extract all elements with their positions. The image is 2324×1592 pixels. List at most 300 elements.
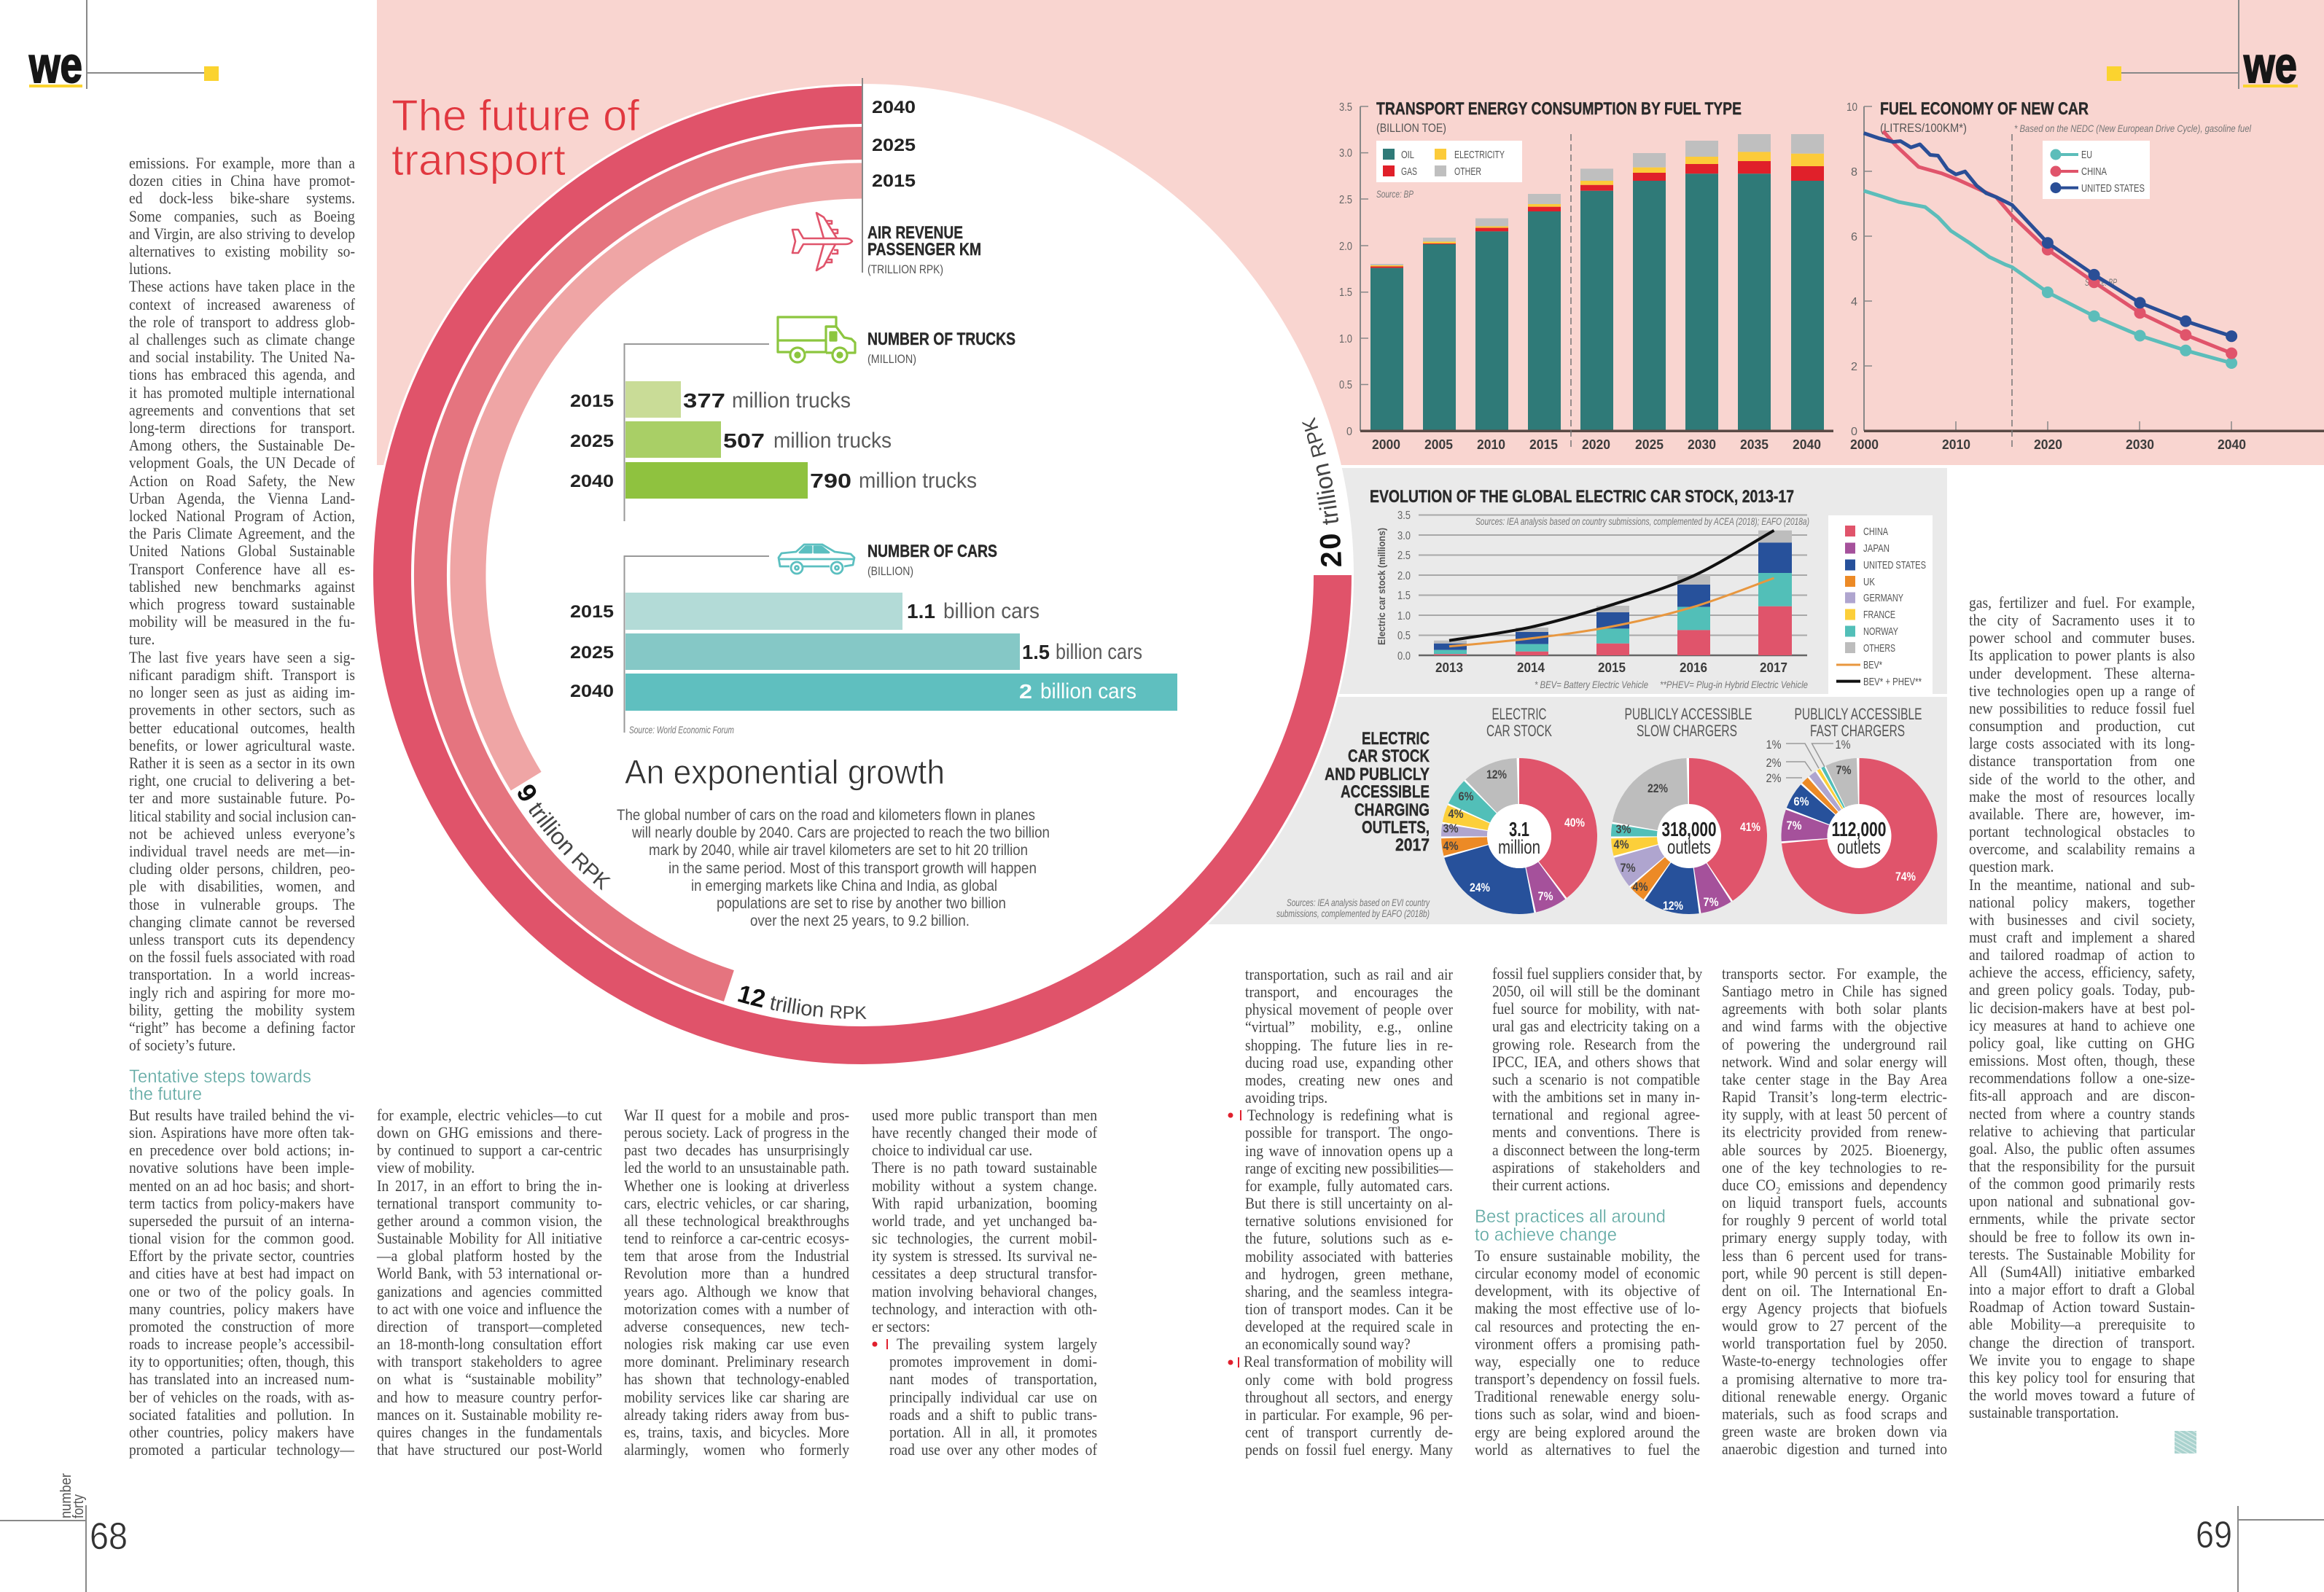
text column: right page 1: “virtual” mobility, e.g., online — [1245, 1018, 1453, 1036]
label: number of trucks: (MILLION) — [867, 352, 916, 366]
footnote — [1535, 679, 1808, 690]
x axis years: 2000 — [1372, 437, 1400, 452]
y axis: 3.0 — [1339, 147, 1352, 160]
text column: tentative steps 3: has shown that technology-enabled — [624, 1370, 849, 1388]
axes: 2010 — [1942, 437, 1970, 452]
text column: tentative steps 4: world trade, and yet unchanged ba- — [872, 1211, 1097, 1230]
x axis years: 2015 — [1598, 660, 1626, 675]
ring year labels — [872, 98, 916, 191]
divider line at ring start — [862, 78, 863, 273]
x axis years: 2013 — [1435, 660, 1463, 675]
text column: tentative steps 4: choice to individual car use. — [872, 1141, 1032, 1159]
masthead: we logo left: we — [28, 36, 82, 93]
text column: left page top: transportation. In a world increas- — [129, 965, 355, 983]
text column: tentative steps 3: adverse consequences, new tech- — [624, 1317, 849, 1335]
text column: right page 1: ing wave of innovation opens up a — [1245, 1142, 1453, 1160]
donut heading — [1624, 705, 1752, 740]
text column: right page 4: the world moves toward a future of — [1969, 1386, 2195, 1404]
text column: right page 2: their current actions. — [1492, 1176, 1610, 1194]
text column: right page 4: with businesses and civil society, — [1969, 910, 2195, 929]
text column: left page top: al challenges such as climate change — [129, 330, 355, 348]
bar chart: trucks: 2015 — [570, 391, 614, 411]
line: EU — [1864, 191, 2237, 369]
legend: fuel types: ELECTRICITY — [1454, 149, 1505, 161]
text column: right page 3: a promising alternative to more tra- — [1722, 1370, 1947, 1388]
percentage labels — [1766, 738, 1916, 883]
icon: airplane — [792, 213, 852, 270]
text block: exponential growth summary: mark by 2040, while air travel kilometers are set to hit 20 trillion — [649, 842, 1028, 859]
percentage labels: 4% — [1448, 807, 1464, 821]
gridlines and y axis labels — [1397, 510, 1807, 663]
text column: right page 4: ernments, while the private sector — [1969, 1209, 2195, 1228]
text column: right page 4: consumption and production, cut — [1969, 717, 2195, 735]
axes: 2 — [1851, 361, 1857, 373]
label: number of trucks: NUMBER OF TRUCKS — [867, 329, 1015, 349]
text column: tentative steps 3: cars, electric vehicles, or car sharing, — [624, 1194, 849, 1212]
text column: left page top: The last five years have seen a sig- — [129, 648, 355, 666]
legend: fuel types: OIL — [1401, 149, 1414, 161]
text column: tentative steps 4: portation. All in all, it promotes — [889, 1423, 1097, 1441]
text column: right page 3: and wind farms with the objective — [1722, 1017, 1947, 1035]
ring year labels: 2025 — [872, 136, 916, 155]
text column: right page 1: Technology is redefining what is — [1247, 1106, 1453, 1124]
axes: 8 — [1851, 166, 1857, 179]
axes: 10 — [1847, 101, 1857, 114]
text column: right page 4: Roadmap of Action toward Sustain- — [1969, 1298, 2195, 1316]
x axis years: 2015 — [1529, 437, 1558, 452]
percentage labels: 7% — [1620, 861, 1636, 875]
donut heading — [1795, 705, 1922, 740]
text column: right page 3: anaerobic digestion and turned into — [1722, 1440, 1947, 1458]
x axis years — [1435, 660, 1787, 675]
text column: left page top: ingly rich and aspiring for more mo- — [129, 983, 355, 1002]
axes: 2040 — [2218, 437, 2246, 452]
text column: left page top: bility, getting the mobility system — [129, 1001, 355, 1019]
bar chart: cars: 2040 — [570, 682, 614, 701]
text block: exponential growth summary: The global number of cars on the road and kilometers flown in planes — [617, 807, 1035, 824]
text column: best practices: development, with its objective of — [1475, 1281, 1700, 1300]
text column: tentative steps 3: Revolution more than a hundred — [624, 1264, 849, 1282]
text column: best practices: transport’s dependency on fossil fuels. — [1475, 1370, 1700, 1388]
text column: tentative steps 2: down on GHG emissions and there- — [377, 1123, 602, 1142]
text column: right page 2: ural gas and electricity taking on a — [1492, 1017, 1700, 1035]
x axis years: 2010 — [1477, 437, 1505, 452]
text column: tentative steps 2: view of mobility. — [377, 1158, 475, 1177]
chart: fuel economy of new car — [1847, 99, 2324, 452]
text column: right page 1: the future, solutions such as e- — [1245, 1229, 1453, 1247]
text column: tentative steps 4: er sectors: — [872, 1317, 930, 1335]
text column: left page top: ture. — [129, 630, 155, 648]
axes: 4 — [1851, 296, 1857, 308]
text column: tentative steps 4: principally individual car use on — [889, 1388, 1097, 1405]
text column: right page 2 — [1492, 964, 1703, 1194]
text column: right page 3: Rapid Transit’s long-term electric- — [1722, 1088, 1947, 1106]
text column: left page top: Action on Road Safety, the New — [129, 472, 355, 490]
axes — [1847, 101, 2324, 452]
text column: right page 4: should be free to follow its own in- — [1969, 1228, 2195, 1246]
text column: right page 4: into a major effort to draft a Global — [1969, 1280, 2195, 1298]
text column: tentative steps 4: cessitates a deep structural transfor- — [872, 1264, 1097, 1282]
text column: right page 4: national policy makers, together — [1969, 893, 2195, 911]
text column: right page 3: dent on oil. The International En- — [1722, 1281, 1947, 1300]
chart title: (LITRES/100KM*) — [1880, 121, 1967, 135]
text column: right page 3: materials, such as food scraps and — [1722, 1405, 1947, 1423]
donut centre value: 318,000 — [1662, 818, 1716, 840]
text column: tentative steps 1: ity to opportunities; often, though, this — [129, 1352, 354, 1370]
percentage labels: 4% — [1614, 838, 1629, 851]
text column: right page 3: for roughly 9 percent of world total — [1722, 1211, 1947, 1229]
text column: tentative steps 4: There is no path toward sustainable — [872, 1158, 1097, 1177]
text column: left page top: unless transport cuts its dependency — [129, 930, 355, 948]
legend: regions: CHINA — [2081, 165, 2107, 178]
pink header background — [377, 0, 2324, 465]
text column: tentative steps 1: superseded the pursuit of an interna- — [129, 1211, 354, 1230]
icon: car — [779, 545, 854, 574]
text column: left page top: the Paris Climate Agreement, and the — [129, 524, 355, 542]
chart title: TRANSPORT ENERGY CONSUMPTION BY FUEL TYPE — [1376, 99, 1742, 119]
chart: transport energy consumption by fuel type — [1339, 99, 1833, 452]
bar chart: cars: 2 — [1019, 680, 1032, 703]
text column: left page top: benefits, or lower agricultural waste. — [129, 736, 355, 754]
legend: countries: CHINA — [1863, 526, 1888, 538]
y axis: 1.0 — [1339, 333, 1352, 346]
text column: tentative steps 2: ternational transport community to- — [377, 1194, 602, 1212]
legend: fuel types: OTHER — [1454, 165, 1481, 178]
text column: tentative steps 3: nologies risk making car use even — [624, 1335, 849, 1353]
legend: regions: UNITED STATES — [2081, 182, 2145, 195]
text column: right page 4: emissions. Most often, though, these — [1969, 1051, 2195, 1069]
legend: countries: GERMANY — [1863, 592, 1903, 604]
text column: best practices: ergy are being explored around the — [1475, 1423, 1700, 1441]
grey panel: charging outlets pies — [1166, 697, 1947, 924]
text column: tentative steps 1: sion. Aspirations have more often tak- — [129, 1123, 354, 1142]
text column: right page 2: ternational and regional agree- — [1492, 1105, 1700, 1123]
text column: best practices: tions such as solar, wind and bioen- — [1475, 1405, 1700, 1423]
heading: best practices all around: to achieve change — [1475, 1225, 1617, 1245]
text column: right page 1: range of exciting new possibilities— — [1245, 1159, 1453, 1177]
text column: right page 4: available. There are, however, im- — [1969, 805, 2195, 823]
percentage labels: 24% — [1470, 881, 1490, 894]
source: charging outlets: Sources: IEA analysis based on EVI country — [1287, 897, 1430, 908]
chart: evolution of the global electric car stock — [1370, 487, 1933, 694]
legend: fuel types: GAS — [1401, 165, 1417, 178]
text column: tentative steps 2: In 2017, in an effort to bring the in- — [377, 1177, 602, 1195]
text column: right page 4: make the most of resources locally — [1969, 787, 2195, 805]
bar chart: cars: billion cars — [1040, 679, 1136, 703]
text column: left page top: lutions. — [129, 260, 171, 278]
donut heading: FAST CHARGERS — [1810, 722, 1905, 740]
text column: tentative steps 4: sic technologies, the current mobil- — [872, 1229, 1097, 1247]
text column: left page top: United Nations Global Sustainable — [129, 542, 355, 560]
gridlines and y axis labels: 1.5 — [1397, 590, 1411, 602]
text column: left page top: tablished new benchmarks against — [129, 577, 355, 596]
gridlines and y axis labels: 3.0 — [1397, 530, 1411, 542]
source: charging outlets: submissions, complemented by EAFO (2018b) — [1276, 908, 1430, 919]
folio: page 69: 69 — [2196, 1514, 2232, 1556]
gridlines and y axis labels: 0.0 — [1397, 650, 1411, 663]
bar chart: trucks: million trucks — [773, 429, 892, 453]
text column: right page 1: ternative solutions envisioned for — [1245, 1211, 1453, 1230]
text column: tentative steps 4: have recently changed their mode of — [872, 1123, 1097, 1142]
heading: electric car stock and charging outlets: CHARGING — [1354, 800, 1430, 820]
text column: left page top: litical stability and social inclusion can- — [129, 807, 356, 825]
label: number of cars: (BILLION) — [867, 564, 913, 578]
grey panel: electric car stock chart — [1239, 468, 1947, 694]
text column: right page 2: aspirations of stakeholders and — [1492, 1158, 1700, 1177]
text column: left page top: locked National Program of Action, — [129, 507, 355, 525]
text column: right page 3: able sources by 2025. Bioenergy, — [1722, 1141, 1947, 1159]
donut centre value: outlets — [1667, 836, 1711, 858]
text column: tentative steps 1: roads to increase people’s accessibil- — [129, 1335, 354, 1353]
text column: tentative steps 2: Sustainable Mobility for All initiative — [377, 1229, 602, 1247]
text column: right page 2: IPCC, IEA, and others shows that — [1492, 1053, 1700, 1071]
text column: tentative steps 3: War II quest for a mobile and pros- — [624, 1106, 849, 1124]
text column: right page 4: goal. Also, the public often assumes — [1969, 1139, 2195, 1158]
bar chart: trucks: million trucks — [859, 469, 977, 493]
text column: left page top: it has promoted multiple international — [129, 383, 355, 402]
heading: electric car stock and charging outlets: 2017 — [1395, 835, 1430, 855]
cars bracket lines — [624, 556, 769, 733]
x axis years: 2005 — [1424, 437, 1453, 452]
legend: countries: UNITED STATES — [1863, 559, 1926, 571]
text column: right page 1: possible for transport. The ongo- — [1245, 1123, 1453, 1142]
percentage labels: 2% — [1766, 771, 1782, 785]
text column: right page 3: ditional renewable energy. Organic — [1722, 1387, 1947, 1405]
text column: right page 4: this key policy tool for ensuring that — [1969, 1368, 2195, 1386]
heading: tentative steps towards the future: the future — [129, 1084, 202, 1104]
text column: right page 4: question mark. — [1969, 857, 2054, 875]
text column: tentative steps 1: promoted a particular technology— — [129, 1440, 354, 1459]
text column: right page 1: ducing road use, expanding other — [1245, 1053, 1453, 1072]
heading: electric car stock and charging outlets: AND PUBLICLY — [1325, 765, 1430, 784]
gridlines and y axis labels: 0.5 — [1397, 630, 1411, 642]
bar chart: trucks — [570, 381, 977, 499]
text column: right page 4: policy goal, like cutting on GHG — [1969, 1034, 2195, 1052]
bar chart: cars: 2015 — [570, 602, 614, 622]
text column: tentative steps 3: tend to reinforce a car-centric ecosys- — [624, 1229, 849, 1247]
text column: right page 1: transportation, such as rail and air — [1245, 965, 1453, 983]
text column: left page top: velopment Goals, the UN Decade of — [129, 453, 355, 472]
text column: right page 1: shopping. The future lies in re- — [1245, 1036, 1453, 1054]
donut heading: PUBLICLY ACCESSIBLE — [1624, 705, 1752, 723]
percentage labels: 3% — [1615, 822, 1631, 836]
donut centre value: million — [1498, 836, 1540, 858]
donut heading: SLOW CHARGERS — [1637, 722, 1737, 740]
source note: Sources: IEA analysis based on country submissions, complemented by ACEA (2018); EAFO (2018a) — [1475, 515, 1809, 527]
text column: tentative steps 3: es, trains, taxis, and bicycles. More — [624, 1423, 849, 1441]
source text behind lines: Source: BP — [2085, 276, 2117, 288]
text column: right page 4: and green policy goals. Today, pub- — [1969, 980, 2195, 999]
text column: right page 4: of the common good primarily rests — [1969, 1174, 2195, 1193]
bar chart: cars: billion cars — [1056, 640, 1142, 664]
percentage labels: 4% — [1633, 880, 1648, 894]
text column: left page top: alternatives to existing mobility so- — [129, 242, 355, 260]
text column: right page 4: side of the world to the other, and — [1969, 770, 2195, 788]
text column: left page top: on the fossil fuels associated with road — [129, 948, 355, 966]
text column: right page 4: under development. These alterna- — [1969, 664, 2195, 682]
percentage labels: 7% — [1703, 895, 1719, 909]
text column: left page top: long-term directions for transport. — [129, 418, 355, 437]
text column: right page 4: icy measures at hand to achieve one — [1969, 1016, 2195, 1034]
legend: countries: JAPAN — [1863, 542, 1890, 555]
text column: tentative steps 3 — [624, 1106, 850, 1459]
text column: best practices: way, especially one to reduce — [1475, 1352, 1700, 1370]
text column: tentative steps 3: alarmingly, women who formerly — [624, 1440, 849, 1459]
legend: regions: EU — [2081, 149, 2092, 161]
text column: best practices: circular economy model of economic — [1475, 1264, 1700, 1282]
legend: fuel types — [1376, 141, 1522, 182]
text column: right page 4: able Mobility—a prerequisite to — [1969, 1315, 2195, 1333]
text column: tentative steps 2: gether around a common vision, the — [377, 1211, 602, 1230]
axes: 2030 — [2126, 437, 2154, 452]
text column: tentative steps 4: promotes improvement in domi- — [889, 1352, 1097, 1370]
x axis years: 2040 — [1793, 437, 1821, 452]
text column: tentative steps 4: technology, and interaction with oth- — [872, 1300, 1097, 1318]
text column: tentative steps 3: years ago. Although we know that — [624, 1282, 849, 1300]
y axis — [1339, 101, 1368, 438]
percentage labels: 74% — [1895, 870, 1916, 883]
heading: tentative steps towards the future — [129, 1066, 311, 1104]
text column: tentative steps 2: that have structured our post-World — [377, 1440, 602, 1459]
text column: right page 4: gas, fertilizer and fuel. For example, — [1969, 593, 2195, 612]
percentage labels: 3% — [1443, 822, 1458, 835]
line: United States — [1864, 133, 2237, 342]
text column: tentative steps 1: tional vision for the common good. — [129, 1229, 354, 1247]
y axis: 3.5 — [1339, 101, 1352, 114]
text column: right page 4: recommendations follow a one-size- — [1969, 1069, 2195, 1087]
folio: page 68: number — [58, 1473, 74, 1518]
text column: right page 2: ments and conventions. There is — [1492, 1123, 1700, 1141]
label: number of trucks — [867, 329, 1015, 366]
text column: tentative steps 4 — [872, 1106, 1098, 1459]
label: number of cars — [867, 542, 997, 578]
line: BEV plus PHEV — [1449, 531, 1774, 641]
heading: electric car stock and charging outlets — [1325, 729, 1430, 855]
text column: tentative steps 4: used more public transport than men — [872, 1106, 1097, 1124]
text column: right page 1: But there is still uncertainty on al- — [1245, 1194, 1453, 1212]
percentage labels: 41% — [1740, 820, 1760, 834]
text column: tentative steps 4: nant modes of transportation, — [889, 1370, 1097, 1388]
text block: exponential growth summary: in emerging markets like China and India, as global — [691, 878, 997, 894]
donut heading: CAR STOCK — [1486, 722, 1552, 740]
text column: tentative steps 3: motorization comes with a number of — [624, 1300, 849, 1318]
text column: tentative steps 4: The prevailing system largely — [897, 1335, 1097, 1353]
percentage labels: 6% — [1793, 795, 1809, 808]
chart title: FUEL ECONOMY OF NEW CAR — [1880, 99, 2089, 119]
text column: right page 1: mobility associated with batteries — [1245, 1246, 1453, 1265]
text column: tentative steps 2: on what is “sustainable mobility” — [377, 1370, 602, 1388]
percentage labels: 1% — [1766, 738, 1782, 752]
text column: right page 3: would grow to 27 percent of the — [1722, 1316, 1947, 1335]
bar chart: trucks: 2025 — [570, 432, 614, 451]
text column: tentative steps 2: direction of transport—completed — [377, 1317, 602, 1335]
folio: page 69 — [2196, 1506, 2324, 1592]
text column: right page 3: take center stage in the Bay Area — [1722, 1070, 1947, 1088]
text column: right page 3: duce CO₂ emissions and dependency — [1722, 1176, 1947, 1194]
text column: right page 4: large costs associated with its long- — [1969, 734, 2195, 752]
gridlines and y axis labels: 1.0 — [1397, 610, 1411, 623]
y axis: 2.0 — [1339, 241, 1352, 253]
white circle background — [371, 84, 1354, 1066]
donut heading: ELECTRIC — [1492, 705, 1547, 723]
percentage labels: 12% — [1663, 899, 1683, 913]
text column: tentative steps 1: and cities have at best had impact on — [129, 1264, 354, 1282]
text column: right page 4: distance transportation from one — [1969, 752, 2195, 770]
x axis years: 2014 — [1517, 660, 1545, 675]
axes: 2000 — [1850, 437, 1879, 452]
donut slices — [1441, 758, 1597, 914]
x axis years: 2016 — [1680, 660, 1707, 675]
text column: tentative steps 2: an 18-month-long consultation effort — [377, 1335, 602, 1353]
text column: right page 3: Santiago metro in Chile has signed — [1722, 982, 1947, 1000]
chart title: (BILLION TOE) — [1376, 121, 1446, 135]
text column: tentative steps 2: quires changes in the fundamentals — [377, 1423, 602, 1441]
legend: countries: BEV* — [1863, 659, 1882, 671]
text column: right page 1: in particular. For example, 96 per- — [1245, 1405, 1453, 1424]
source: BP: Source: BP — [1376, 188, 1413, 200]
text column: right page 3: agreements with both solar plants — [1722, 999, 1947, 1018]
text column: right page 3: ity supply, with at least 50 percent of — [1722, 1105, 1947, 1123]
text column: right page 1: Real transformation of mobility will — [1244, 1352, 1453, 1370]
heading: electric car stock and charging outlets: OUTLETS, — [1362, 818, 1430, 838]
bullets: red markers — [872, 1110, 1241, 1367]
text column: left page top: context of increased awareness of — [129, 295, 355, 313]
percentage labels: 6% — [1458, 789, 1474, 803]
heading: electric car stock and charging outlets: ACCESSIBLE — [1341, 782, 1430, 802]
text column: right page 2: fuel source for mobility, with nat- — [1492, 999, 1700, 1018]
text column: left page top: cluding older persons, children, peo- — [129, 859, 355, 878]
donut heading: PUBLICLY ACCESSIBLE — [1795, 705, 1922, 723]
axes: 6 — [1851, 231, 1857, 243]
text column: right page 3: of powering the underground rail — [1722, 1035, 1947, 1053]
text column: best practices: Traditional renewable energy solu- — [1475, 1387, 1700, 1405]
text column: best practices: vironment offers a promising path- — [1475, 1335, 1700, 1353]
text column: right page 1: and hydrogen, green methane, — [1245, 1265, 1453, 1283]
text column: right page 2: 2050, oil will still be the dominant — [1492, 982, 1700, 1000]
text column: tentative steps 2: ganizations and agencies committed — [377, 1282, 602, 1300]
source: charging outlets — [1276, 897, 1430, 919]
text column: left page top: ple with disabilities, women, and — [129, 877, 355, 895]
text column: left page top: “right” has become a defining factor — [129, 1018, 355, 1037]
text column: right page 4: terests. The Sustainable Mobility for — [1969, 1245, 2195, 1263]
folio: page 68: forty — [71, 1494, 87, 1518]
percentage labels — [1443, 768, 1585, 903]
text column: left page top: emissions. For example, more than a — [129, 154, 355, 172]
text column: right page 4: lic decision-makers have at best pol- — [1969, 999, 2195, 1017]
text column: right page 4: change the direction of transport. — [1969, 1333, 2195, 1351]
text column: right page 4: We invite you to engage to shape — [1969, 1351, 2195, 1369]
ring value: 20 trillion RPK: 20 trillion RPK — [1302, 417, 1341, 567]
text column: left page top: those in vulnerable groups. The — [129, 895, 355, 913]
text column: left page top: ter and more sustainable future. Po- — [129, 789, 355, 807]
text column: right page 2: with the ambitions set in many in- — [1492, 1088, 1700, 1106]
text column: tentative steps 1: sociated fatalities and pollution. In — [129, 1405, 354, 1424]
bar chart: cars — [570, 593, 1177, 711]
text column: right page 3: its electricity provided from renew- — [1722, 1123, 1947, 1141]
text column: right page 4: Its application to power plants is also — [1969, 646, 2195, 664]
text column: right page 1: an economically sound way? — [1245, 1335, 1411, 1353]
percentage labels: 7% — [1836, 763, 1852, 777]
text column: right page 4: nected from where a country stands — [1969, 1104, 2195, 1123]
end mark: hatched square — [2175, 1431, 2196, 1454]
text column: right page 4: tive technologies open up a range of — [1969, 682, 2195, 700]
text column: tentative steps 3: past two decades has unsurprisingly — [624, 1141, 849, 1159]
text column: right page 1: throughout all sectors, and energy — [1245, 1388, 1453, 1406]
chart title — [1376, 99, 1742, 135]
text column: right page 2: fossil fuel suppliers consider that, by — [1492, 964, 1702, 983]
text column: tentative steps 4: mation involving behavioral changes, — [872, 1282, 1097, 1300]
text column: left page top: changing climate cannot be reversed — [129, 913, 355, 931]
